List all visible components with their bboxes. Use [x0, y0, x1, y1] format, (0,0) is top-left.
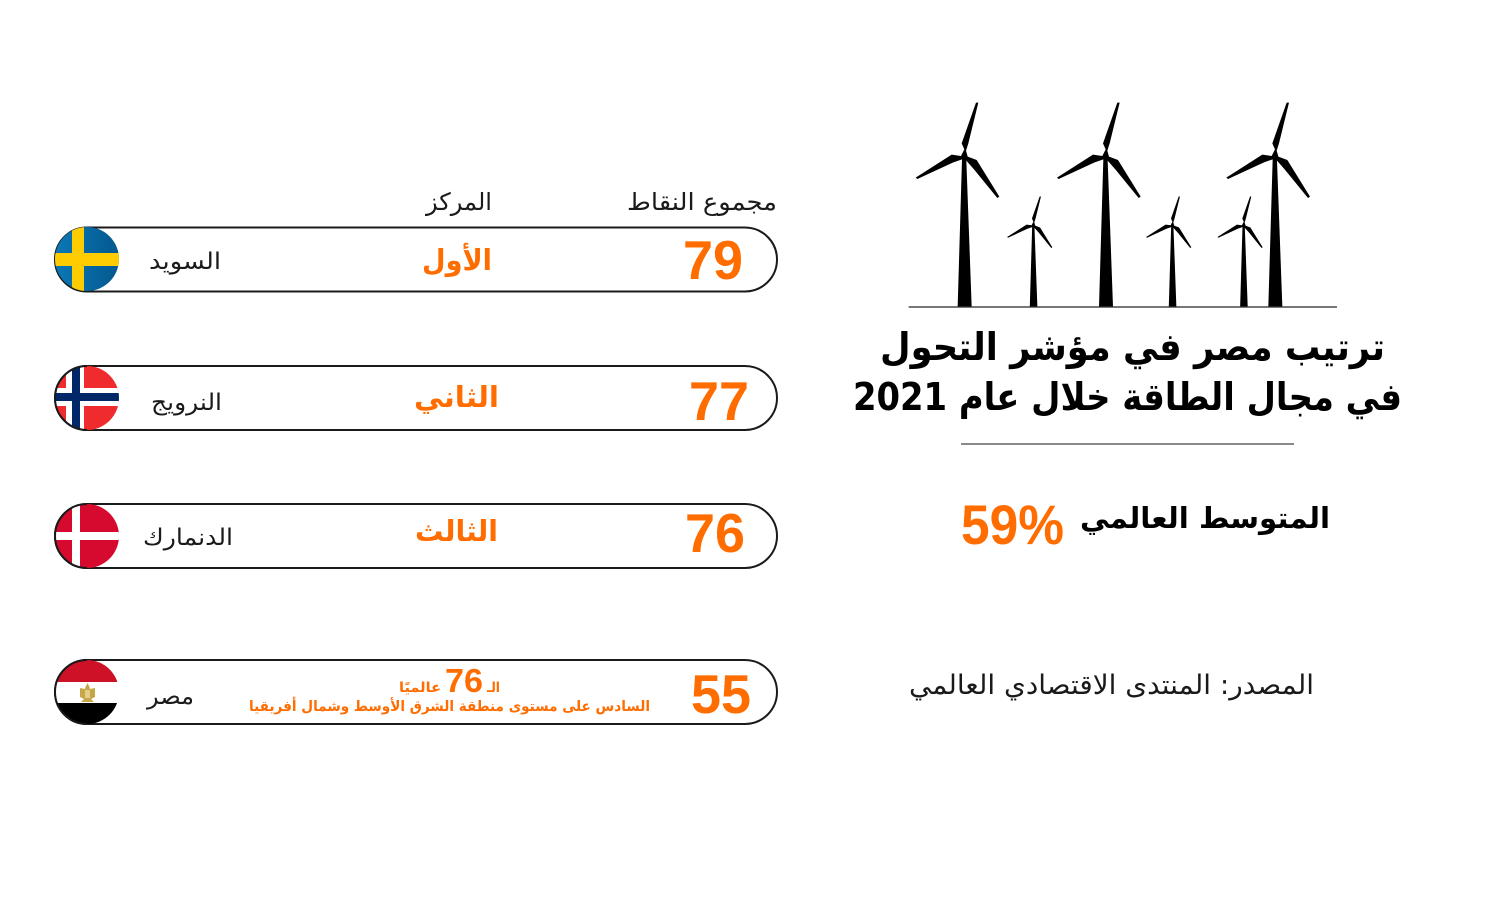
row: Sweden: الأول	[422, 242, 492, 277]
flag outline: Egypt	[55, 660, 87, 724]
flag outline: Denmark	[55, 504, 87, 568]
title	[853, 325, 1402, 420]
average label: المتوسط العالمي	[1080, 501, 1330, 535]
global average	[961, 493, 1330, 556]
flag: Egypt	[55, 660, 119, 724]
flag: Denmark	[55, 504, 119, 568]
title: ترتيب مصر في مؤشر التحول	[880, 325, 1385, 369]
average value: 59%	[961, 493, 1064, 556]
flag outline: Norway	[55, 366, 87, 430]
flag: Sweden	[55, 227, 119, 291]
row: Egypt	[55, 660, 777, 725]
Egypt rank note	[249, 662, 650, 715]
row: Norway: 77	[689, 370, 749, 432]
row: Norway: الثاني	[414, 380, 499, 414]
row: Denmark: الدنمارك	[143, 525, 233, 551]
row: Sweden: السويد	[149, 249, 221, 275]
Egypt rank note: عالميًا	[399, 680, 441, 696]
row: Norway	[55, 365, 777, 432]
row: Sweden: 79	[683, 229, 743, 291]
Egypt rank note: 76	[445, 662, 483, 699]
icon: wind turbines	[909, 103, 1337, 308]
column heading: rank: المركز	[425, 188, 492, 216]
row: Denmark: 76	[685, 502, 745, 564]
source: المصدر: المنتدى الاقتصادي العالمي	[909, 670, 1314, 701]
row: Egypt: 55	[691, 663, 751, 725]
column heading: total points: مجموع النقاط	[627, 188, 777, 216]
Egypt rank note: الـ	[486, 680, 500, 696]
row: Norway: النرويج	[151, 390, 222, 416]
row: Denmark: الثالث	[415, 514, 498, 548]
row: Sweden	[55, 227, 777, 292]
title: في مجال الطاقة خلال عام 2021	[853, 375, 1402, 420]
Egypt rank note: السادس على مستوى منطقة الشرق الأوسط وشمال أفريقيا	[249, 697, 650, 715]
row: Denmark	[55, 502, 777, 568]
row: Egypt: مصر	[146, 684, 194, 710]
flag: Norway	[55, 365, 120, 431]
